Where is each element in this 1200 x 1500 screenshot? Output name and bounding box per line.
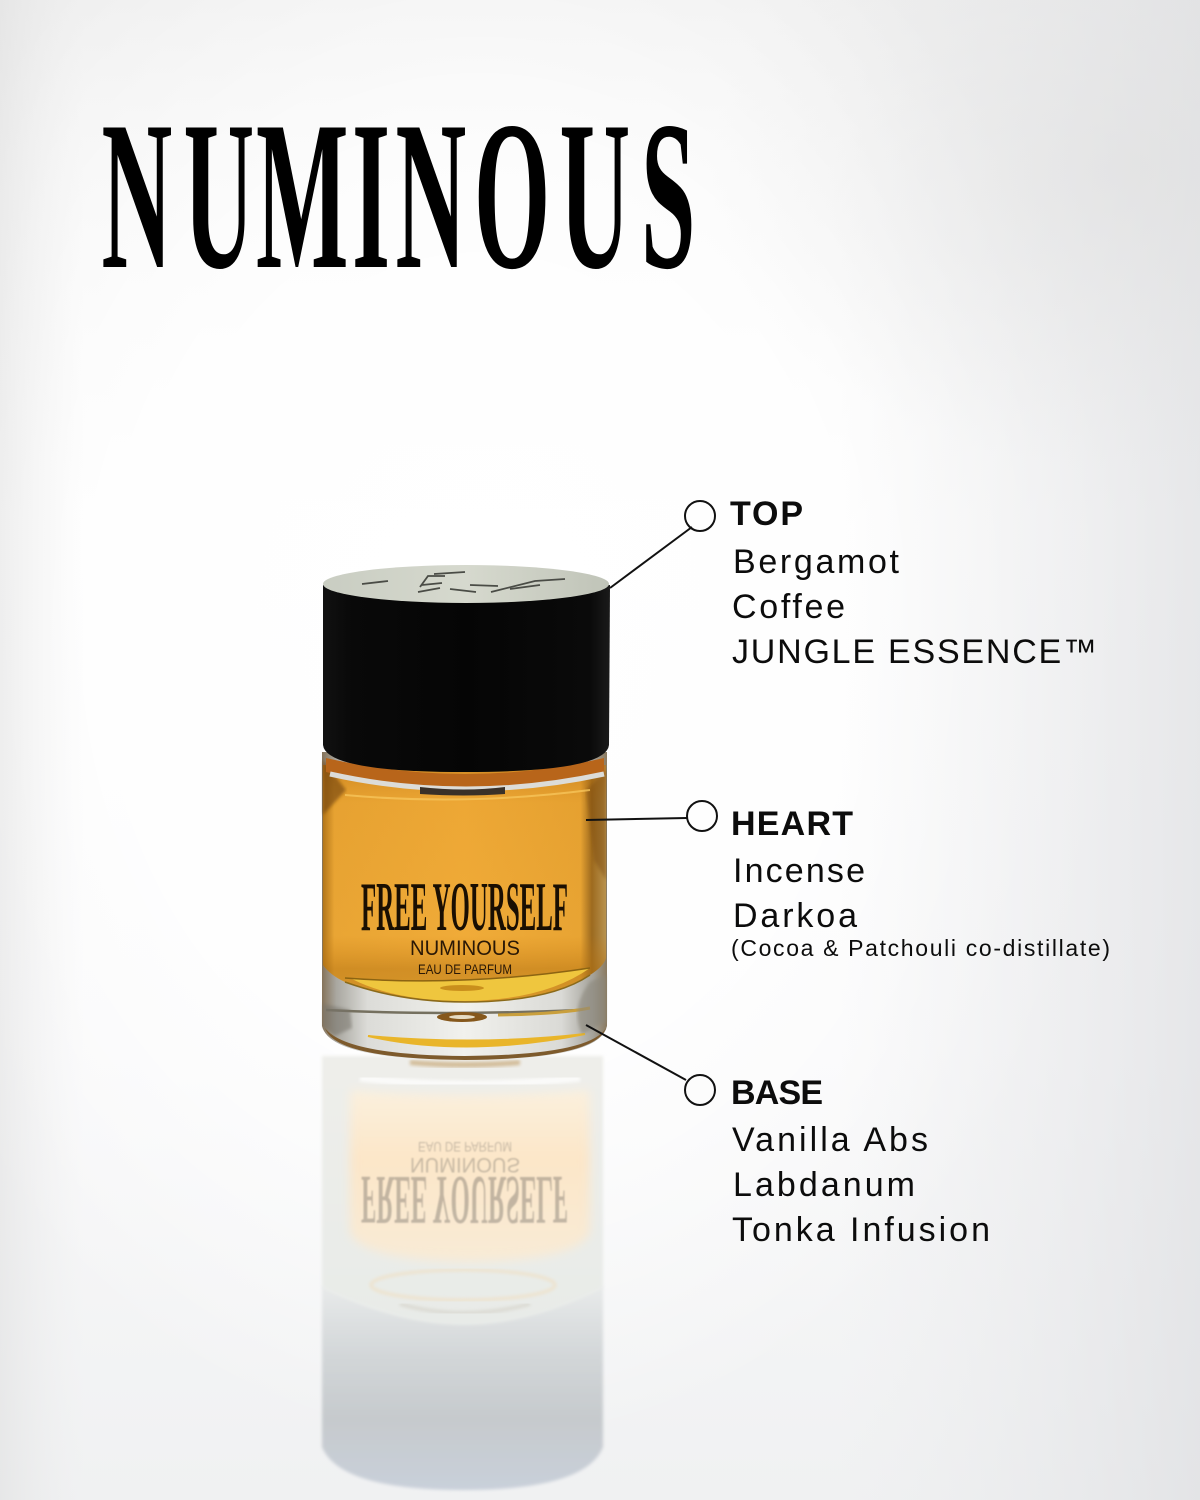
text: heart notes: Darkoa: [733, 897, 857, 935]
bottle reflection: [322, 1056, 603, 1490]
text: top notes: Bergamot: [733, 543, 900, 581]
connector: base: [586, 1025, 686, 1080]
title: NUMINOUS: [102, 77, 696, 313]
text: base notes: Vanilla Abs: [732, 1121, 928, 1159]
connector: top: [610, 527, 692, 588]
glass shoulder and collar: [326, 758, 604, 799]
text: heart notes: (Cocoa & Patchouli co-distillate): [731, 935, 1110, 961]
text: heart notes: HEART: [731, 805, 853, 843]
marker: base: [685, 1075, 715, 1105]
text: heart notes: [731, 805, 1110, 961]
callout: heart notes: [586, 801, 1110, 961]
text: heart notes: Incense: [733, 852, 865, 890]
text: base notes: Tonka Infusion: [732, 1211, 990, 1249]
text: base notes: BASE: [731, 1074, 823, 1112]
black cap: [323, 585, 610, 772]
text: base notes: Labdanum: [733, 1166, 915, 1204]
callout: base notes: [586, 1025, 990, 1249]
glass body: [322, 752, 607, 1060]
text: FREE YOURSELF: [361, 1161, 568, 1238]
reflected label: EAU DE PARFUM: [418, 1139, 512, 1154]
text: top notes: Coffee: [732, 588, 845, 626]
connector: heart: [586, 818, 687, 820]
bottle label: EAU DE PARFUM: [418, 962, 512, 977]
text: base notes: [731, 1074, 990, 1249]
marker: heart: [687, 801, 717, 831]
text: top notes: JUNGLE ESSENCE™: [732, 633, 1097, 671]
reflected label: NUMINOUS: [410, 1153, 520, 1176]
text: FREE YOURSELF: [361, 869, 568, 946]
perfume bottle: [322, 565, 610, 1060]
reflected label: [361, 1139, 568, 1238]
bottle label: [361, 869, 568, 977]
bottle label: NUMINOUS: [410, 937, 520, 960]
text: top notes: TOP: [730, 495, 803, 533]
cap top with embossed logo: [323, 565, 609, 603]
callout: top notes: [610, 495, 1097, 671]
text: top notes: [730, 495, 1097, 671]
amber liquid: [323, 760, 606, 1002]
base refractions: [323, 968, 606, 1060]
marker: top: [685, 501, 715, 531]
